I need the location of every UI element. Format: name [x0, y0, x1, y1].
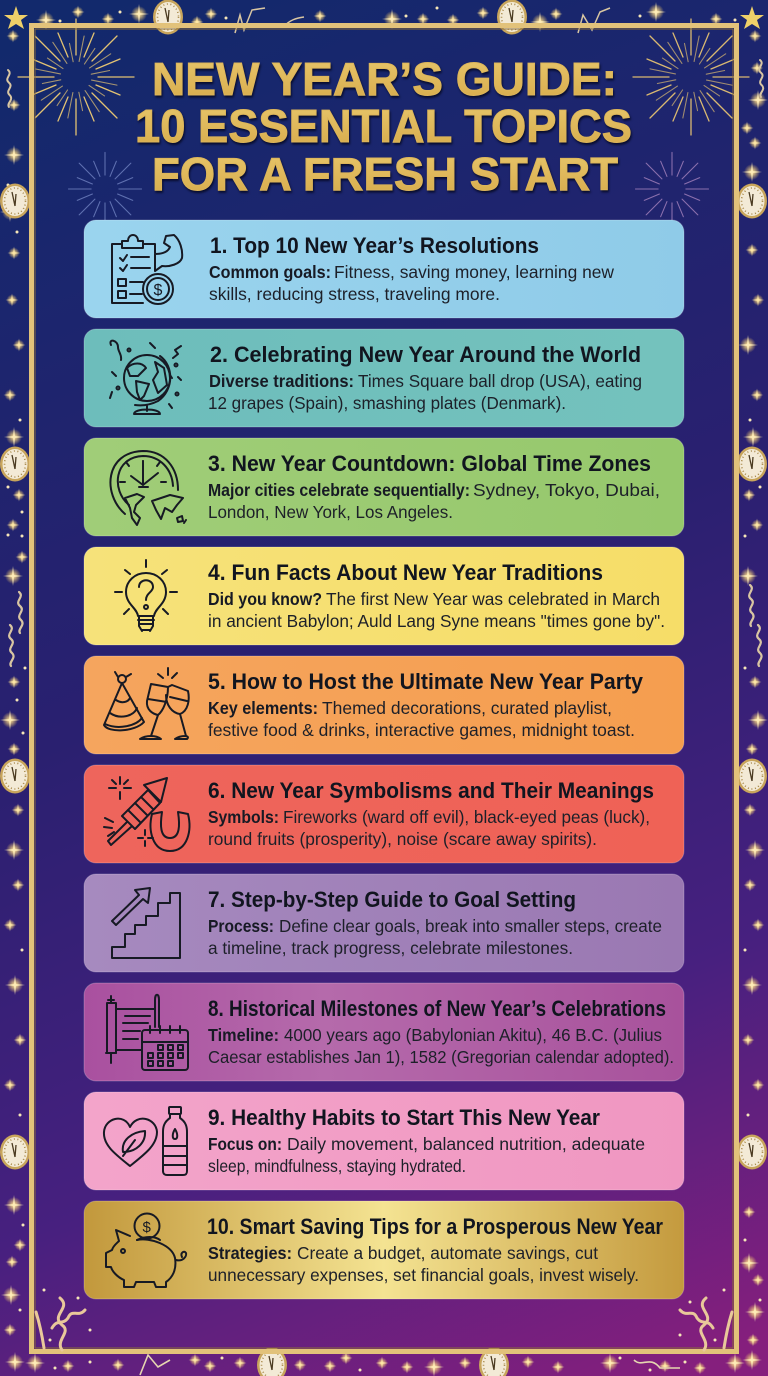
title: NEW YEAR’S GUIDE:: [152, 53, 617, 105]
panel: 10 saving tips: [84, 1201, 684, 1299]
body text: [208, 1243, 639, 1285]
icon: clock and world map: [110, 451, 186, 525]
body text: Key elements:: [208, 698, 318, 718]
icon: question mark light bulb: [115, 560, 177, 631]
icon: heart with leaf and water bottle: [104, 1107, 187, 1175]
body text: Timeline:: [208, 1025, 279, 1045]
body text: [208, 480, 660, 522]
icon: clipboard, muscle and coin: [112, 235, 182, 304]
body text: The first New Year was celebrated in March: [326, 589, 660, 609]
panel: 9 healthy habits: [84, 1092, 684, 1190]
body text: [208, 589, 665, 631]
body text: 12 grapes (Spain), smashing plates (Denmark).: [208, 393, 566, 413]
body text: skills, reducing stress, traveling more.: [209, 284, 500, 304]
body text: Focus on:: [208, 1134, 282, 1154]
icon: party hat and champagne flutes: [104, 668, 189, 739]
panel: 3 countdown: [84, 438, 684, 536]
heading: 9. Healthy Habits to Start This New Year: [208, 1105, 600, 1130]
body text: [208, 916, 662, 958]
body text: Themed decorations, curated playlist,: [322, 698, 612, 718]
body text: Daily movement, balanced nutrition, adequate: [287, 1134, 645, 1154]
icon: clipboard, muscle and coin: $: [154, 282, 162, 299]
body text: 4000 years ago (Babylonian Akitu), 46 B.C. (Julius: [284, 1025, 662, 1045]
body text: sleep, mindfulness, staying hydrated.: [208, 1156, 466, 1176]
right column: [738, 30, 768, 1346]
body text: round fruits (prosperity), noise (scare away spirits).: [208, 829, 597, 849]
body text: Fitness, saving money, learning new: [334, 262, 614, 282]
body text: Sydney, Tokyo, Dubai,: [473, 480, 660, 500]
panel: 4 fun facts: [84, 547, 684, 645]
body text: [208, 807, 650, 849]
body text: Times Square ball drop (USA), eating: [358, 371, 642, 391]
icon: piggy bank and coin: $: [142, 1219, 152, 1236]
icon: piggy bank and coin: [106, 1214, 186, 1287]
panel: 2 around the world: [84, 329, 684, 427]
body text: [209, 262, 614, 304]
body text: [208, 1134, 645, 1176]
left column: [0, 30, 28, 1336]
heading: 3. New Year Countdown: Global Time Zones: [208, 451, 651, 476]
title: [135, 53, 632, 200]
panel: 5 party: [84, 656, 684, 754]
body text: Strategies:: [208, 1243, 292, 1263]
bottom corner ribbons: [36, 1288, 732, 1350]
body text: Define clear goals, break into smaller steps, create: [279, 916, 662, 936]
body text: Fireworks (ward off evil), black-eyed peas (luck),: [283, 807, 650, 827]
icon: firework rocket and horseshoe: [104, 777, 189, 851]
body text: in ancient Babylon; Auld Lang Syne means "times gone by".: [208, 611, 665, 631]
body text: Caesar establishes Jan 1), 1582 (Gregorian calendar adopted).: [208, 1047, 674, 1067]
body text: Process:: [208, 916, 274, 936]
body text: London, New York, Los Angeles.: [208, 502, 453, 522]
fireworks: [18, 19, 749, 226]
panel: 1 resolutions: [84, 220, 684, 318]
heading: 2. Celebrating New Year Around the World: [210, 342, 641, 367]
title: FOR A FRESH START: [152, 148, 618, 200]
icon: stairs and arrow: [112, 888, 180, 958]
body text: Did you know?: [208, 589, 322, 609]
heading: 5. How to Host the Ultimate New Year Party: [208, 669, 643, 694]
body text: unnecessary expenses, set financial goals, invest wisely.: [208, 1265, 639, 1285]
heading: 4. Fun Facts About New Year Traditions: [208, 560, 603, 585]
body text: a timeline, track progress, celebrate milestones.: [208, 938, 573, 958]
body text: Diverse traditions:: [209, 371, 354, 391]
body text: Symbols:: [208, 807, 279, 827]
body text: [208, 371, 642, 413]
bottom row: [5, 1350, 762, 1376]
body text: festive food & drinks, interactive games, midnight toast.: [208, 720, 635, 740]
heading: 6. New Year Symbolisms and Their Meanings: [208, 778, 654, 803]
body text: [208, 698, 635, 740]
body text: Common goals:: [209, 262, 331, 282]
corner stars: [4, 6, 764, 29]
heading: 7. Step-by-Step Guide to Goal Setting: [208, 887, 576, 912]
heading: 1. Top 10 New Year’s Resolutions: [210, 233, 539, 258]
heading: 8. Historical Milestones of New Year’s Celebrations: [208, 996, 666, 1021]
panel: 7 goal setting: [84, 874, 684, 972]
panel: 6 symbolisms: [84, 765, 684, 863]
body text: [208, 1025, 674, 1067]
icon: scroll and calendar: [106, 995, 188, 1070]
heading: 10. Smart Saving Tips for a Prosperous New Year: [207, 1214, 663, 1239]
icon: globe and confetti: [110, 341, 181, 414]
body text: Create a budget, automate savings, cut: [297, 1243, 598, 1263]
body text: Major cities celebrate sequentially:: [208, 480, 470, 500]
panel: 8 milestones: [84, 983, 684, 1081]
title: 10 ESSENTIAL TOPICS: [135, 100, 632, 152]
